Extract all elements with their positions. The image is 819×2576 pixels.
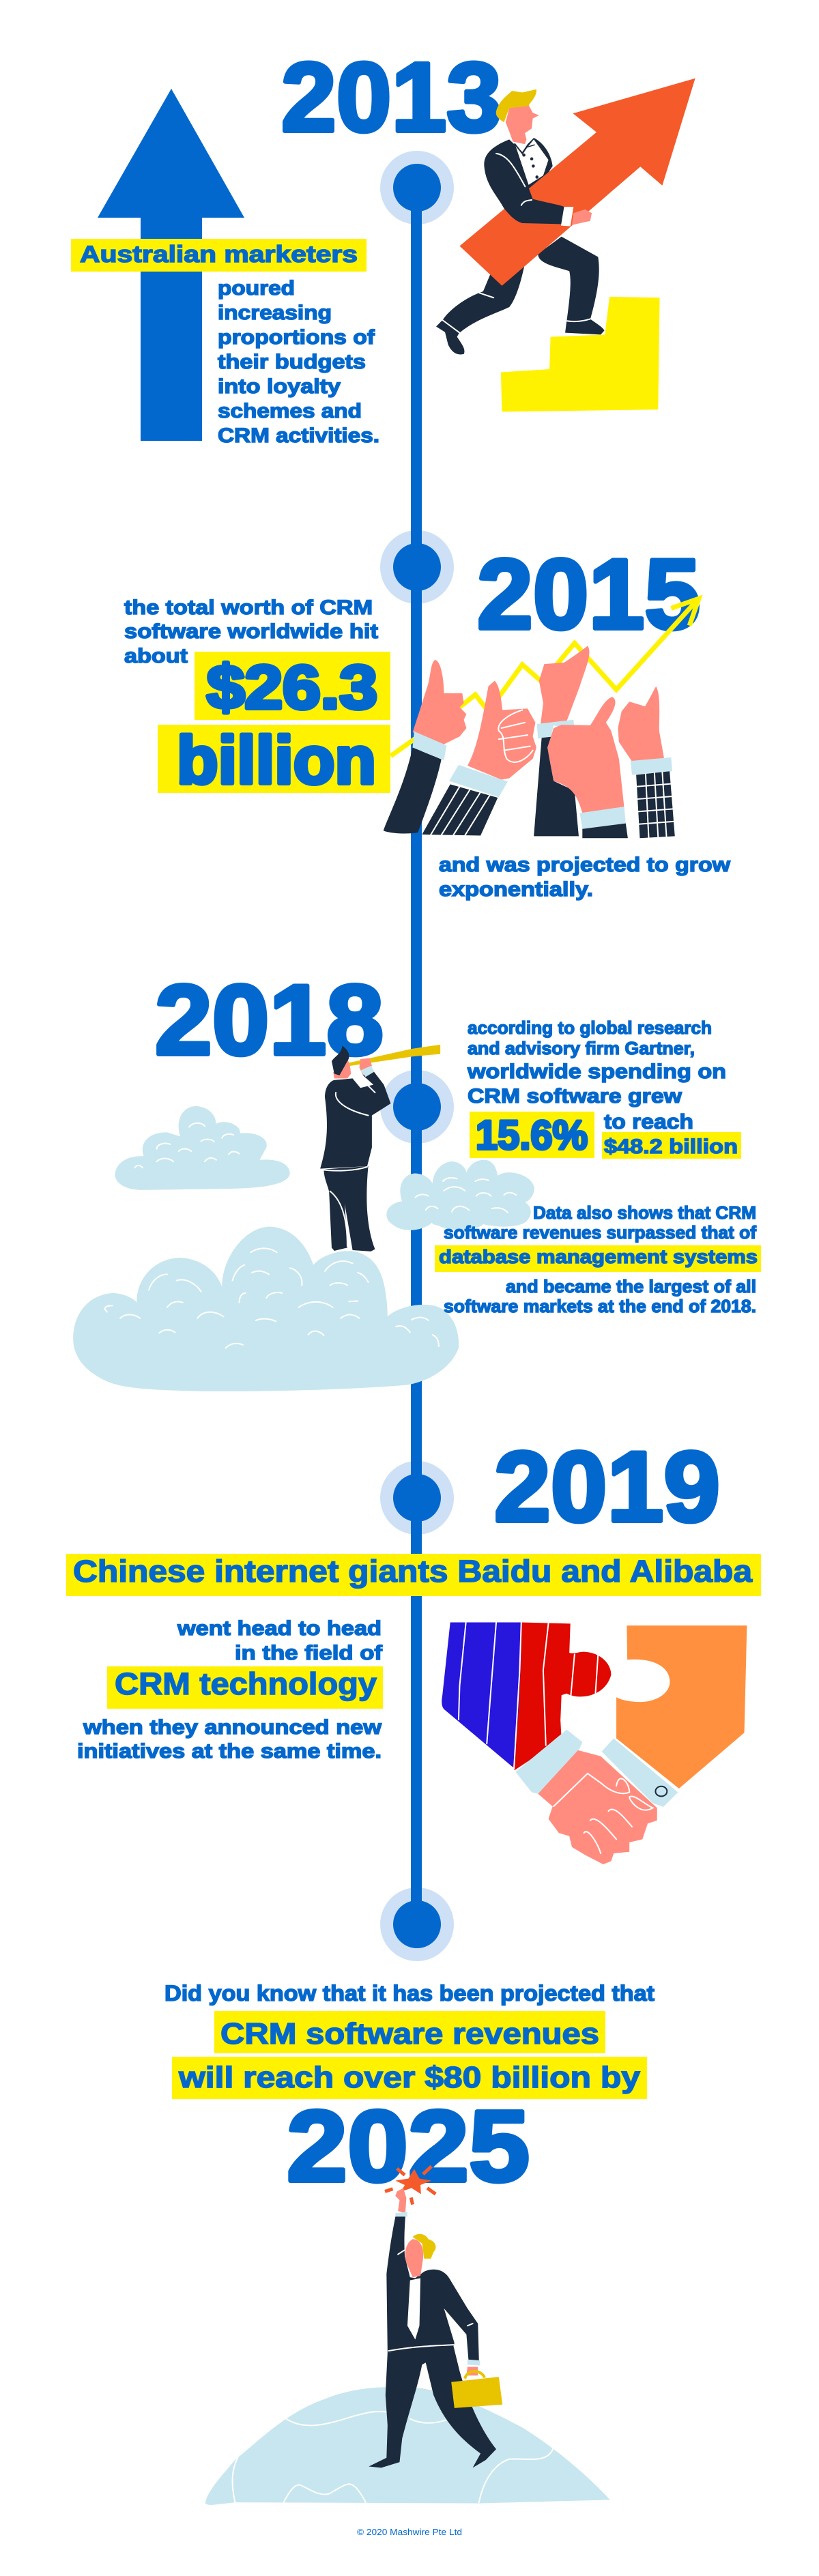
text: went head to head: went head to head xyxy=(177,1617,382,1640)
highlight: CRM technology: CRM technology xyxy=(115,1666,377,1701)
text: 2015 intro: about xyxy=(124,645,188,667)
text: 2018 data intro: software revenues surpassed that of xyxy=(444,1222,756,1243)
illustration: man carrying arrow up steps xyxy=(436,78,695,411)
highlight: database management systems: database management systems xyxy=(439,1246,758,1267)
highlight: will reach over $80 billion by xyxy=(172,2057,647,2099)
highlight: Chinese internet giants: Chinese internet giants Baidu and Alibaba xyxy=(73,1554,753,1589)
highlight: CRM software revenues: CRM software revenues xyxy=(220,2017,599,2051)
highlight: 15.6%: 15.6% xyxy=(476,1112,588,1158)
text: when they announced xyxy=(77,1716,382,1763)
text: 2013 body: poured xyxy=(218,277,295,300)
text: 2013 body: schemes and xyxy=(218,400,362,422)
illustration: man with telescope xyxy=(320,1045,440,1251)
text: went head to head xyxy=(177,1617,383,1664)
text: 2013 body xyxy=(218,277,379,447)
text: 2013 body: their budgets xyxy=(218,351,366,373)
text: 2015 intro xyxy=(124,596,378,667)
text: 2015 intro: the total worth of CRM xyxy=(124,596,373,619)
text: 2013 body: increasing xyxy=(218,302,332,324)
highlight: $26.3 billion: billion xyxy=(177,723,376,798)
illustration: yellow growth line xyxy=(390,598,699,756)
year: 2025: 2025 xyxy=(287,2090,530,2203)
highlight: Australian marketers: Australian marketers xyxy=(80,242,358,267)
text: did you know: Did you know that it has been projected that xyxy=(164,1981,655,2006)
year: 2015: 2015 xyxy=(477,538,700,650)
highlight: $26.3 billion xyxy=(158,652,390,798)
text: 2018 research: worldwide spending on xyxy=(467,1060,726,1083)
text: when they announced: initiatives at the same time. xyxy=(77,1740,382,1763)
footer copyright: © 2020 Mashwire Pte Ltd xyxy=(357,2527,462,2537)
timeline line and nodes xyxy=(380,151,454,1961)
text: when they announced: when they announced new xyxy=(83,1716,382,1739)
highlight: $48.2 billion: $48.2 billion xyxy=(604,1135,738,1158)
text: to reach: to reach xyxy=(604,1110,693,1133)
illustration: clouds xyxy=(73,1106,459,1391)
highlight: CRM software revenues xyxy=(214,2011,605,2053)
text: 2018 research: and advisory firm Gartner, xyxy=(468,1038,695,1058)
icon: blue up arrow xyxy=(98,89,244,441)
text: 2018 data intro: Data also shows that CRM xyxy=(533,1202,756,1223)
text: 2018 data outro: and became the largest of all xyxy=(506,1276,756,1297)
text: 2018 data intro xyxy=(444,1202,756,1243)
year: 2019: 2019 xyxy=(494,1431,720,1542)
highlight: Australian marketers xyxy=(71,239,367,272)
text: 2018 data outro: software markets at the end of 2018. xyxy=(444,1296,756,1316)
text: 2018 research: CRM software grew xyxy=(468,1085,682,1108)
text: 2013 body: CRM activities. xyxy=(218,424,379,447)
highlight: will reach over $80 billion by: will reach over $80 billion by xyxy=(178,2061,641,2094)
text: 2018 research xyxy=(467,1017,726,1108)
illustration: puzzle handshake xyxy=(442,1623,747,1864)
year: 2018: 2018 xyxy=(155,964,384,1075)
text: 2015 outro: and was projected to grow xyxy=(439,854,731,876)
text: 2013 body: into loyalty xyxy=(218,375,341,398)
illustration: globe xyxy=(205,2387,610,2505)
text: 2015 outro: exponentially. xyxy=(439,878,593,901)
text: 2015 intro: software worldwide hit xyxy=(124,620,378,643)
year: 2013: 2013 xyxy=(281,42,502,152)
highlight: $26.3 billion: $26.3 xyxy=(207,654,377,722)
text: 2018 data outro xyxy=(444,1276,756,1316)
text: 2018 research: according to global research xyxy=(468,1017,712,1038)
illustration: right cloud xyxy=(386,1160,534,1230)
text: 2015 outro xyxy=(439,854,731,901)
text: 2013 body: proportions of xyxy=(218,326,375,349)
illustration: thumbs up hands xyxy=(384,646,675,838)
text: went head to head: in the field of xyxy=(235,1642,383,1664)
illustration: man reaching for star xyxy=(369,2167,502,2468)
